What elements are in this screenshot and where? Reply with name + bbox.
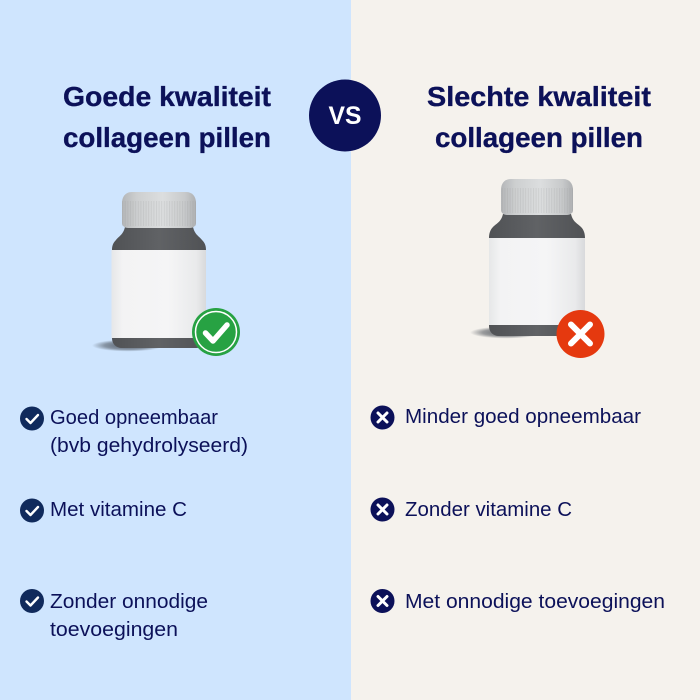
point: with unnecessary additives: Met onnodige toevoegingen — [405, 591, 665, 613]
point: good absorbable: Goed opneembaar — [50, 407, 218, 429]
heading: good quality: collageen pillen — [63, 122, 271, 153]
heading: good quality: Goede kwaliteit — [63, 81, 271, 112]
icon: green check badge — [192, 308, 240, 356]
point: no unnecessary additives: toevoegingen — [50, 619, 178, 641]
heading: bad quality — [427, 81, 651, 153]
VS badge: VS — [328, 102, 362, 130]
point: with vitamin C: Met vitamine C — [50, 499, 187, 521]
point: good absorbable: (bvb gehydrolyseerd) — [50, 435, 248, 457]
point: no unnecessary additives: Zonder onnodige — [50, 591, 208, 613]
point: good absorbable — [20, 406, 248, 457]
panel: good quality background — [0, 0, 351, 700]
list: bad quality points — [370, 406, 665, 613]
heading: good quality — [63, 81, 271, 153]
icon: red cross badge — [556, 310, 604, 358]
icon: bad bottle — [470, 179, 585, 338]
list: good quality points — [20, 406, 248, 641]
panel: bad quality background — [351, 0, 700, 700]
heading: bad quality: Slechte kwaliteit — [427, 81, 651, 112]
icon: good bottle — [92, 192, 206, 352]
VS badge — [309, 80, 381, 152]
point: no unnecessary additives — [20, 589, 208, 641]
point: less absorbable: Minder goed opneembaar — [405, 406, 641, 428]
point: without vitamin C: Zonder vitamine C — [405, 499, 572, 521]
heading: bad quality: collageen pillen — [435, 122, 643, 153]
